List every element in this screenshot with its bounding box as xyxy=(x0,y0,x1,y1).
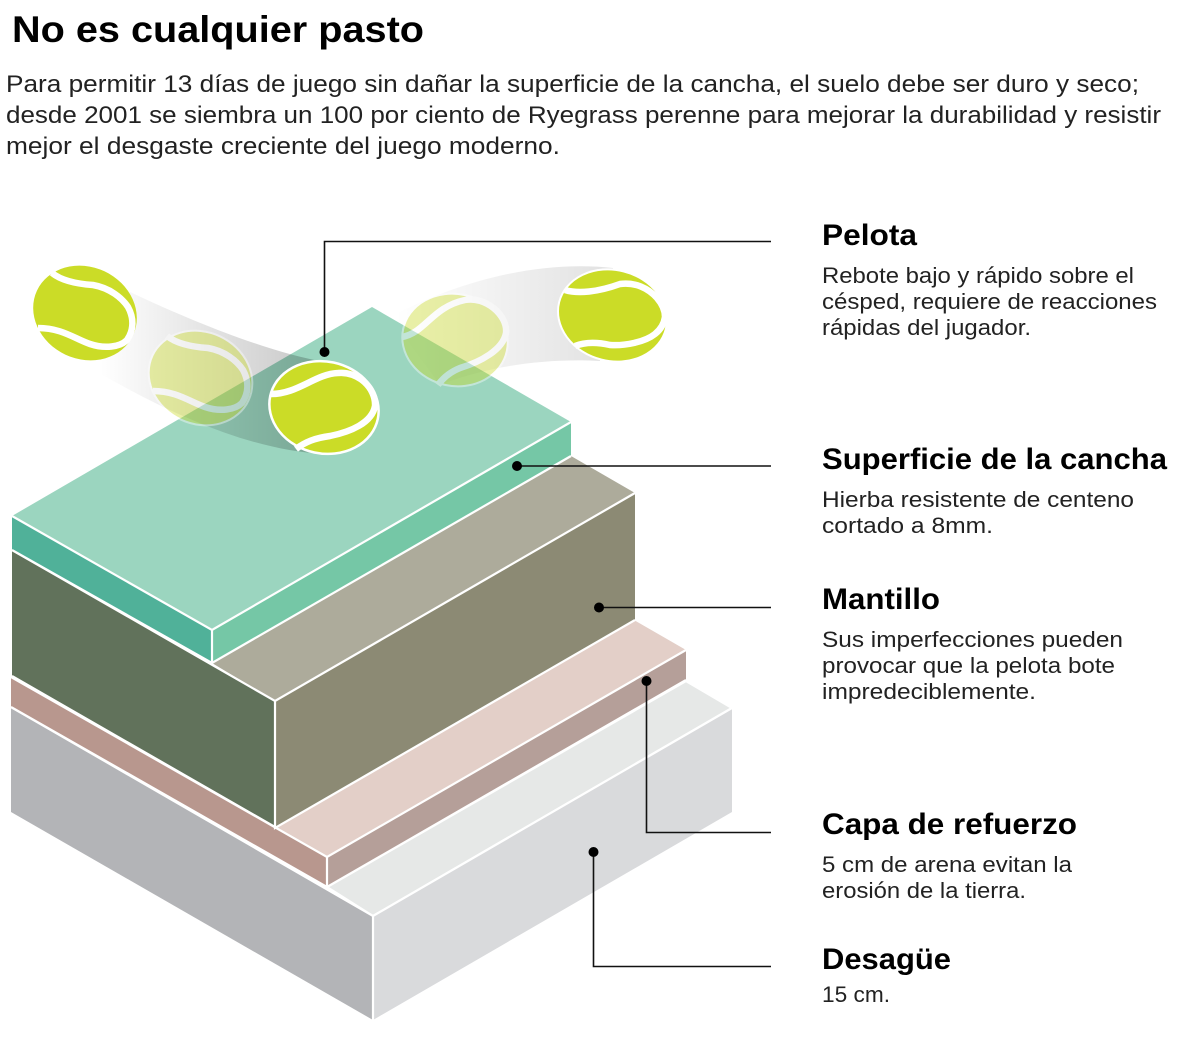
label: pelota: Rebote bajo y rápido sobre el xyxy=(822,263,1134,288)
leader line: pelota xyxy=(320,242,771,357)
label: mantillo: provocar que la pelota bote xyxy=(822,653,1115,678)
intro text: desde 2001 se siembra un 100 por ciento de Ryegrass perenne para mejorar la durabilidad y resistir xyxy=(6,102,1161,129)
leader line: desagüe xyxy=(588,847,771,966)
label: pelota: rápidas del jugador. xyxy=(822,315,1031,340)
label: desagüe xyxy=(822,943,951,1007)
label: pelota: césped, requiere de reacciones xyxy=(822,289,1157,314)
label: capa de refuerzo: Capa de refuerzo xyxy=(822,808,1077,841)
label: mantillo: impredeciblemente. xyxy=(822,679,1036,704)
label: superficie de la cancha: Superficie de la cancha xyxy=(822,443,1167,476)
icon: tennis ball 4 xyxy=(394,284,516,396)
label: capa de refuerzo xyxy=(822,808,1077,903)
label: desagüe: 15 cm. xyxy=(822,982,890,1007)
icon: tennis ball 5 xyxy=(548,258,677,373)
icon: tennis ball 2 xyxy=(133,314,268,442)
label: superficie de la cancha: cortado a 8mm. xyxy=(822,513,993,538)
leader line: mantillo xyxy=(594,602,771,612)
leader line: superficie xyxy=(512,461,771,471)
ball trail: right xyxy=(390,266,613,385)
layer: drainage xyxy=(11,681,732,1020)
layer: mulch xyxy=(12,456,635,828)
label: superficie de la cancha xyxy=(822,443,1167,538)
layer: reinforcement xyxy=(11,620,686,887)
soil layers diagram xyxy=(11,307,732,1020)
leader line: capa de refuerzo xyxy=(642,676,771,832)
label: superficie de la cancha: Hierba resistente de centeno xyxy=(822,487,1134,512)
intro text: Para permitir 13 días de juego sin dañar la superficie de la cancha, el suelo debe ser duro y seco; xyxy=(6,71,1139,98)
label: mantillo: Sus imperfecciones pueden xyxy=(822,627,1123,652)
title: No es cualquier pasto xyxy=(12,9,424,50)
label: capa de refuerzo: erosión de la tierra. xyxy=(822,878,1026,903)
label: mantillo xyxy=(822,583,1123,704)
label: pelota: Pelota xyxy=(822,219,917,252)
intro text: mejor el desgaste creciente del juego moderno. xyxy=(6,133,560,160)
label: desagüe: Desagüe xyxy=(822,943,951,976)
label: mantillo: Mantillo xyxy=(822,583,940,616)
icon: tennis ball 1 xyxy=(18,249,152,377)
intro text xyxy=(6,71,1161,160)
label: pelota xyxy=(822,219,1157,340)
label: capa de refuerzo: 5 cm de arena evitan la xyxy=(822,852,1073,877)
layer: court surface xyxy=(12,307,571,663)
ball trail: left xyxy=(80,292,324,454)
icon: tennis ball 3 xyxy=(261,351,387,464)
